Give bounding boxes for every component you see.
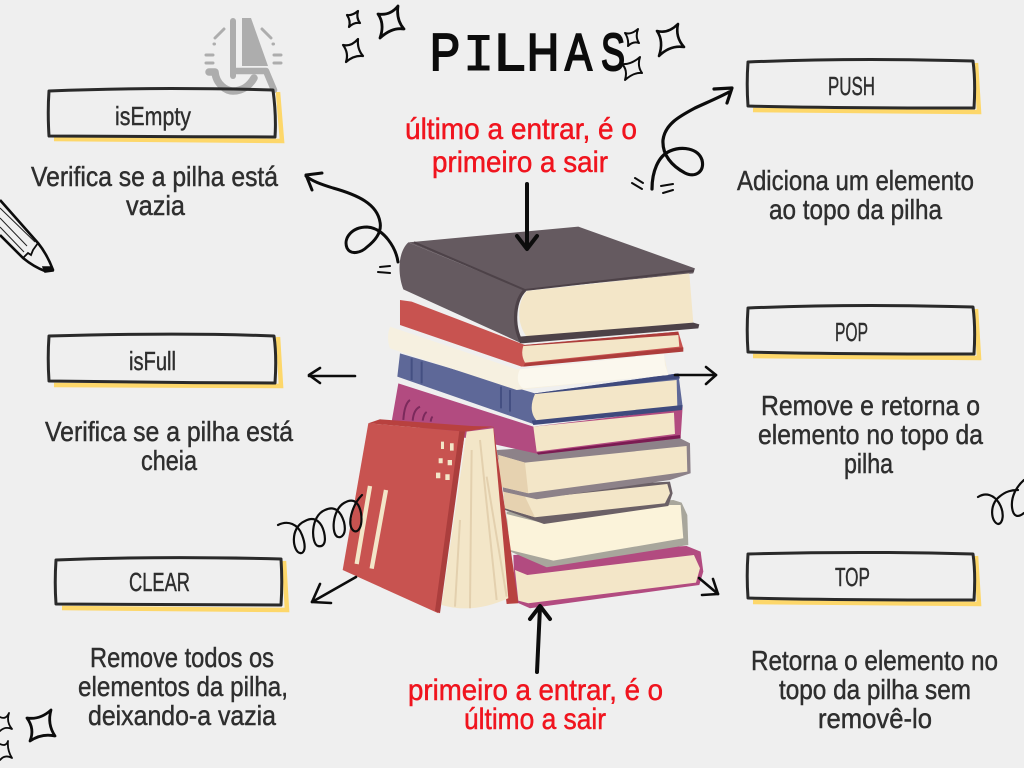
panel: isEmpty (31, 89, 282, 221)
book: bottom magenta (513, 546, 703, 608)
title (430, 24, 625, 86)
book: small grey-brown (503, 482, 673, 524)
title: H (527, 24, 559, 82)
arrow: loop to PUSH (632, 88, 732, 193)
callout: top of stack: primeiro a sair (432, 146, 608, 179)
sparkles top left (343, 6, 404, 62)
panel: isFull: isFull (129, 346, 176, 376)
arrow: loop to isEmpty (306, 173, 398, 273)
panel: PUSH: Adiciona um elemento (737, 165, 974, 196)
book: magenta (392, 383, 683, 455)
panel: POP: POP (835, 317, 868, 347)
doodle: spring left (278, 495, 362, 553)
book: white (388, 327, 668, 390)
book: leaning red (343, 419, 518, 613)
book: top dark (400, 227, 699, 343)
title: I (463, 27, 494, 86)
title: S (601, 24, 625, 82)
panel: isFull: cheia (141, 445, 197, 476)
panel: isEmpty: Verifica se a pilha está (31, 161, 278, 192)
panel: TOP: topo da pilha sem (779, 674, 971, 705)
book: grey cover (497, 438, 691, 499)
book: red (400, 300, 683, 367)
title: P (430, 24, 460, 82)
callout: top of stack (405, 113, 637, 179)
arrow: up to bottom of stack (530, 606, 550, 672)
panel: CLEAR: deixando-a vazia (88, 700, 276, 731)
panel: POP: elemento no topo da (758, 419, 983, 450)
watermark logo (206, 18, 281, 91)
icon: pencil (0, 200, 53, 272)
sparkles bottom left (0, 710, 55, 760)
callout: top of stack: último a entrar, é o (405, 113, 637, 146)
panel: PUSH (737, 60, 979, 225)
panel: isFull: Verifica se a pilha está (45, 416, 293, 447)
arrow: to isFull (309, 368, 355, 383)
arrow: to POP (675, 367, 716, 384)
callout: bottom of stack (408, 674, 663, 736)
panel: POP: pilha (844, 448, 893, 479)
arrow: to TOP (699, 578, 718, 595)
panel: PUSH: PUSH (828, 71, 875, 101)
book: light cream (507, 500, 688, 567)
panel: PUSH: ao topo da pilha (769, 194, 942, 225)
title: L (495, 24, 525, 82)
arrow: to CLEAR (312, 577, 356, 603)
doodle: spring right (978, 480, 1024, 524)
panel: POP (747, 306, 983, 479)
sparkles top right (622, 24, 684, 80)
panel: CLEAR: CLEAR (129, 567, 190, 597)
panel: CLEAR (55, 558, 288, 731)
panel: TOP: TOP (835, 562, 870, 592)
panel: TOP: removê-lo (818, 703, 932, 734)
panel: isEmpty: isEmpty (115, 101, 191, 131)
arrow: down to top of stack (517, 184, 537, 249)
panel: isEmpty: vazia (126, 190, 185, 221)
book: blue (397, 353, 683, 425)
panel: isFull (45, 334, 293, 476)
panel: TOP (747, 552, 998, 734)
title: A (565, 24, 592, 82)
panel: POP: Remove e retorna o (761, 390, 980, 421)
panel: CLEAR: elementos da pilha, (78, 671, 288, 702)
callout: bottom of stack: último a sair (464, 703, 606, 736)
panel: CLEAR: Remove todos os (90, 642, 274, 673)
callout: bottom of stack: primeiro a entrar, é o (408, 674, 663, 707)
illustration: stack of books (343, 227, 703, 613)
